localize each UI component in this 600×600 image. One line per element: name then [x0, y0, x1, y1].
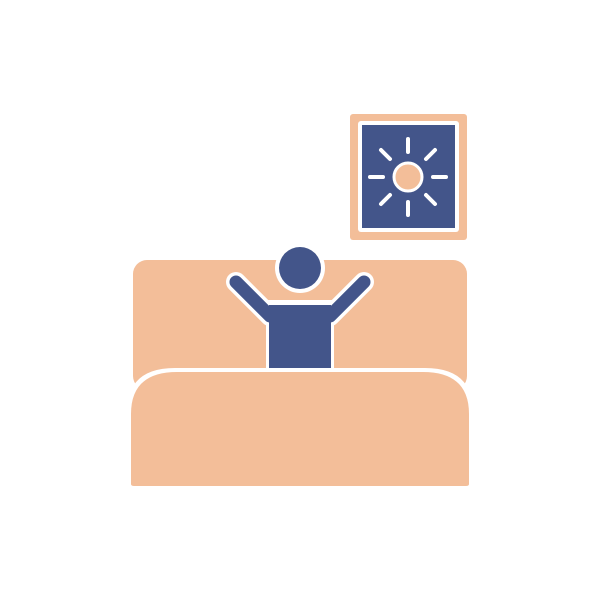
- blanket: [127, 368, 473, 487]
- icon: sun: [370, 139, 446, 215]
- person: [236, 243, 364, 373]
- window frame with sun: [350, 114, 467, 240]
- headboard: [133, 260, 467, 390]
